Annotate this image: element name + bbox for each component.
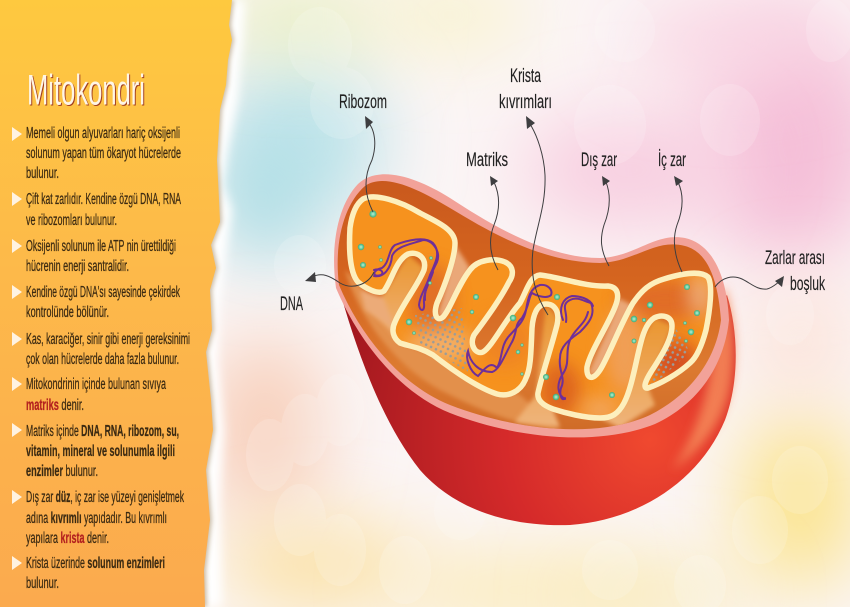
- mitochondrion cross-section illustration: [334, 174, 736, 525]
- text block: bullet list: [26, 125, 190, 592]
- text block: bullet list: Mitokondrinin içinde bulunan sıvıya: [26, 376, 166, 393]
- outer shell: salmon right highlight: [672, 285, 734, 470]
- text block: bullet list: Oksijenli solunum ile ATP nin ürettildiği: [26, 238, 176, 255]
- crista fold shading: [345, 245, 672, 430]
- text block: bullet list: kontrolünde bölünür.: [26, 304, 109, 321]
- label: Matriks: Matriks: [466, 149, 508, 171]
- label: DNA: DNA: [280, 293, 303, 315]
- labels with arrows: [280, 65, 825, 315]
- label: Dış zar: [581, 149, 617, 266]
- matrix: [352, 200, 708, 416]
- text block: bullet list: adına kıvrımlı yapıdadır. Bu kıvrımlı: [26, 510, 167, 527]
- label: Krista kıvrımları: Krista: [510, 65, 541, 87]
- text block: bullet list: solunum yapan tüm ökaryot hücrelerde: [26, 145, 181, 162]
- text block: bullet list: Kendine özgü DNA'sı sayesinde çekirdek: [26, 284, 180, 301]
- label: Zarlar arası boşluk: boşluk: [790, 273, 825, 295]
- label: Krista kıvrımları: [499, 65, 552, 315]
- label: İç zar: İç zar: [658, 148, 686, 171]
- label: İç zar: [658, 148, 686, 272]
- text block: bullet list: matriks denir.: [26, 397, 84, 414]
- inner membrane: cream cristae line: [350, 197, 711, 418]
- text block: bullet list: Krista üzerinde solunum enzimleri: [26, 555, 165, 572]
- ribosome dots: [358, 210, 700, 400]
- text block: bullet list: yapılara krista denir.: [26, 530, 109, 547]
- bullet markers: [12, 127, 22, 570]
- label: Zarlar arası boşluk: [715, 247, 825, 295]
- torn white paper edge: [200, 0, 245, 607]
- outer shell: red body: [338, 285, 736, 525]
- DNA strands: [374, 239, 593, 399]
- text block: bullet list: Dış zar düz, iç zar ise yüzeyi genişletmek: [26, 489, 184, 506]
- text block: bullet list: Memeli olgun alyuvarları hariç oksijenli: [26, 125, 180, 142]
- text block: bullet list: hücrenin enerji santralidir.: [26, 258, 129, 275]
- text block: bullet list: çok olan hücrelerde daha fazla bulunur.: [26, 351, 179, 368]
- text block: bullet list: vitamin, mineral ve solunumla ilgili: [26, 443, 175, 460]
- matrix shading: [406, 264, 712, 424]
- text block: bullet list: bulunur.: [26, 575, 59, 592]
- text block: bullet list: ve ribozomları bulunur.: [26, 212, 117, 229]
- label: Matriks: [466, 149, 508, 270]
- label: Krista kıvrımları: kıvrımları: [499, 91, 552, 113]
- label: DNA: [280, 272, 374, 315]
- text block: bullet list: Matriks içinde DNA, RNA, ribozom, su,: [26, 423, 179, 440]
- label: Ribozom: [339, 91, 387, 212]
- outer membrane: pink rim: [334, 174, 729, 437]
- text block: bullet list: enzimler bulunur.: [26, 463, 98, 480]
- intermembrane space and inner wall: [338, 181, 721, 429]
- heading: Mitokondri: Mitokondri: [27, 66, 145, 114]
- heading: Mitokondri: Mitokondri: [28, 68, 146, 116]
- label: Dış zar: Dış zar: [581, 149, 617, 171]
- panel: left information column: [0, 0, 232, 607]
- text block: bullet list: Kas, karaciğer, sinir gibi enerji gereksinimi: [26, 331, 190, 348]
- label: Ribozom: Ribozom: [339, 91, 387, 113]
- heading: Mitokondri: [27, 66, 146, 116]
- text block: bullet list: Çift kat zarlıdır. Kendine özgü DNA, RNA: [26, 191, 181, 208]
- text block: bullet list: bulunur.: [26, 165, 59, 182]
- panel shadow: [0, 0, 234, 607]
